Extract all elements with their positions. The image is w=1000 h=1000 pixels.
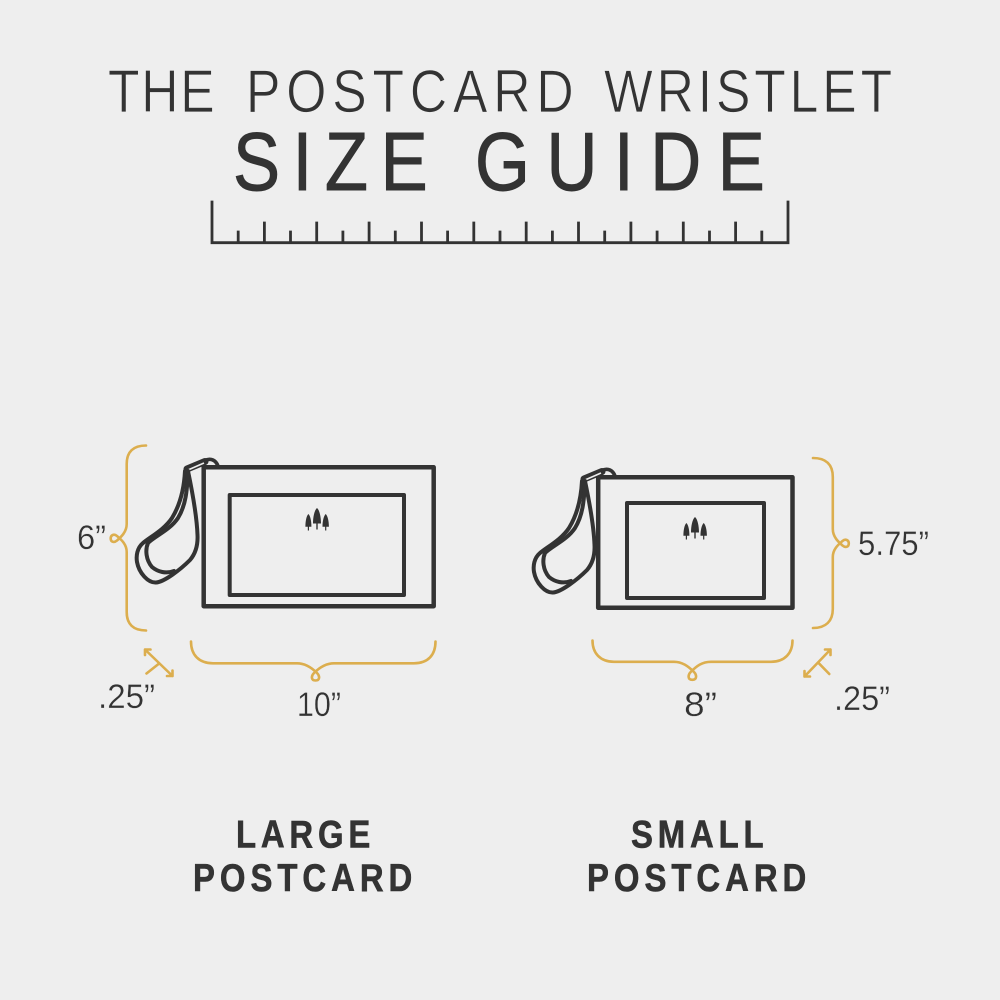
large bag inner pocket bbox=[230, 495, 404, 595]
title: the postcard wristlet: POSTCARD bbox=[246, 57, 574, 125]
label: small postcard: SMALL bbox=[631, 812, 764, 856]
measurement: large width: 10” bbox=[297, 686, 341, 724]
label: large postcard: LARGE bbox=[236, 812, 370, 856]
large bag outline bbox=[204, 467, 434, 606]
measurement: large depth: .25” bbox=[98, 678, 155, 716]
heading: size guide bbox=[233, 116, 765, 208]
brace: large width bbox=[191, 642, 436, 680]
small tree logo bbox=[683, 517, 707, 540]
large wrist strap bbox=[137, 459, 218, 583]
brace: large height bbox=[111, 446, 146, 630]
label: large postcard: POSTCARD bbox=[193, 855, 412, 900]
measurement: small width: 8” bbox=[684, 686, 717, 724]
large wristlet illustration bbox=[137, 459, 434, 606]
arrow: large depth bbox=[145, 650, 172, 676]
small bag inner pocket bbox=[627, 503, 764, 598]
title: the postcard wristlet bbox=[108, 57, 892, 125]
title: the postcard wristlet: THE bbox=[108, 57, 215, 125]
large tree logo bbox=[305, 508, 329, 530]
measurement: large height: 6” bbox=[77, 519, 106, 557]
brace: small height bbox=[813, 458, 849, 628]
measurement: small depth: .25” bbox=[834, 680, 890, 718]
small wristlet illustration bbox=[534, 469, 792, 608]
measurement: small height: 5.75” bbox=[858, 525, 929, 563]
brace: small width bbox=[592, 640, 792, 680]
small bag outline bbox=[598, 477, 792, 608]
ruler bbox=[212, 202, 788, 243]
arrow: small depth bbox=[804, 650, 830, 676]
title: the postcard wristlet: WRISTLET bbox=[604, 57, 892, 125]
heading: size guide: GUIDE bbox=[475, 116, 765, 208]
heading: size guide: SIZE bbox=[233, 116, 428, 208]
label: large postcard bbox=[193, 812, 412, 900]
label: small postcard: POSTCARD bbox=[587, 855, 806, 900]
label: small postcard bbox=[587, 812, 806, 900]
small wrist strap bbox=[534, 469, 615, 593]
